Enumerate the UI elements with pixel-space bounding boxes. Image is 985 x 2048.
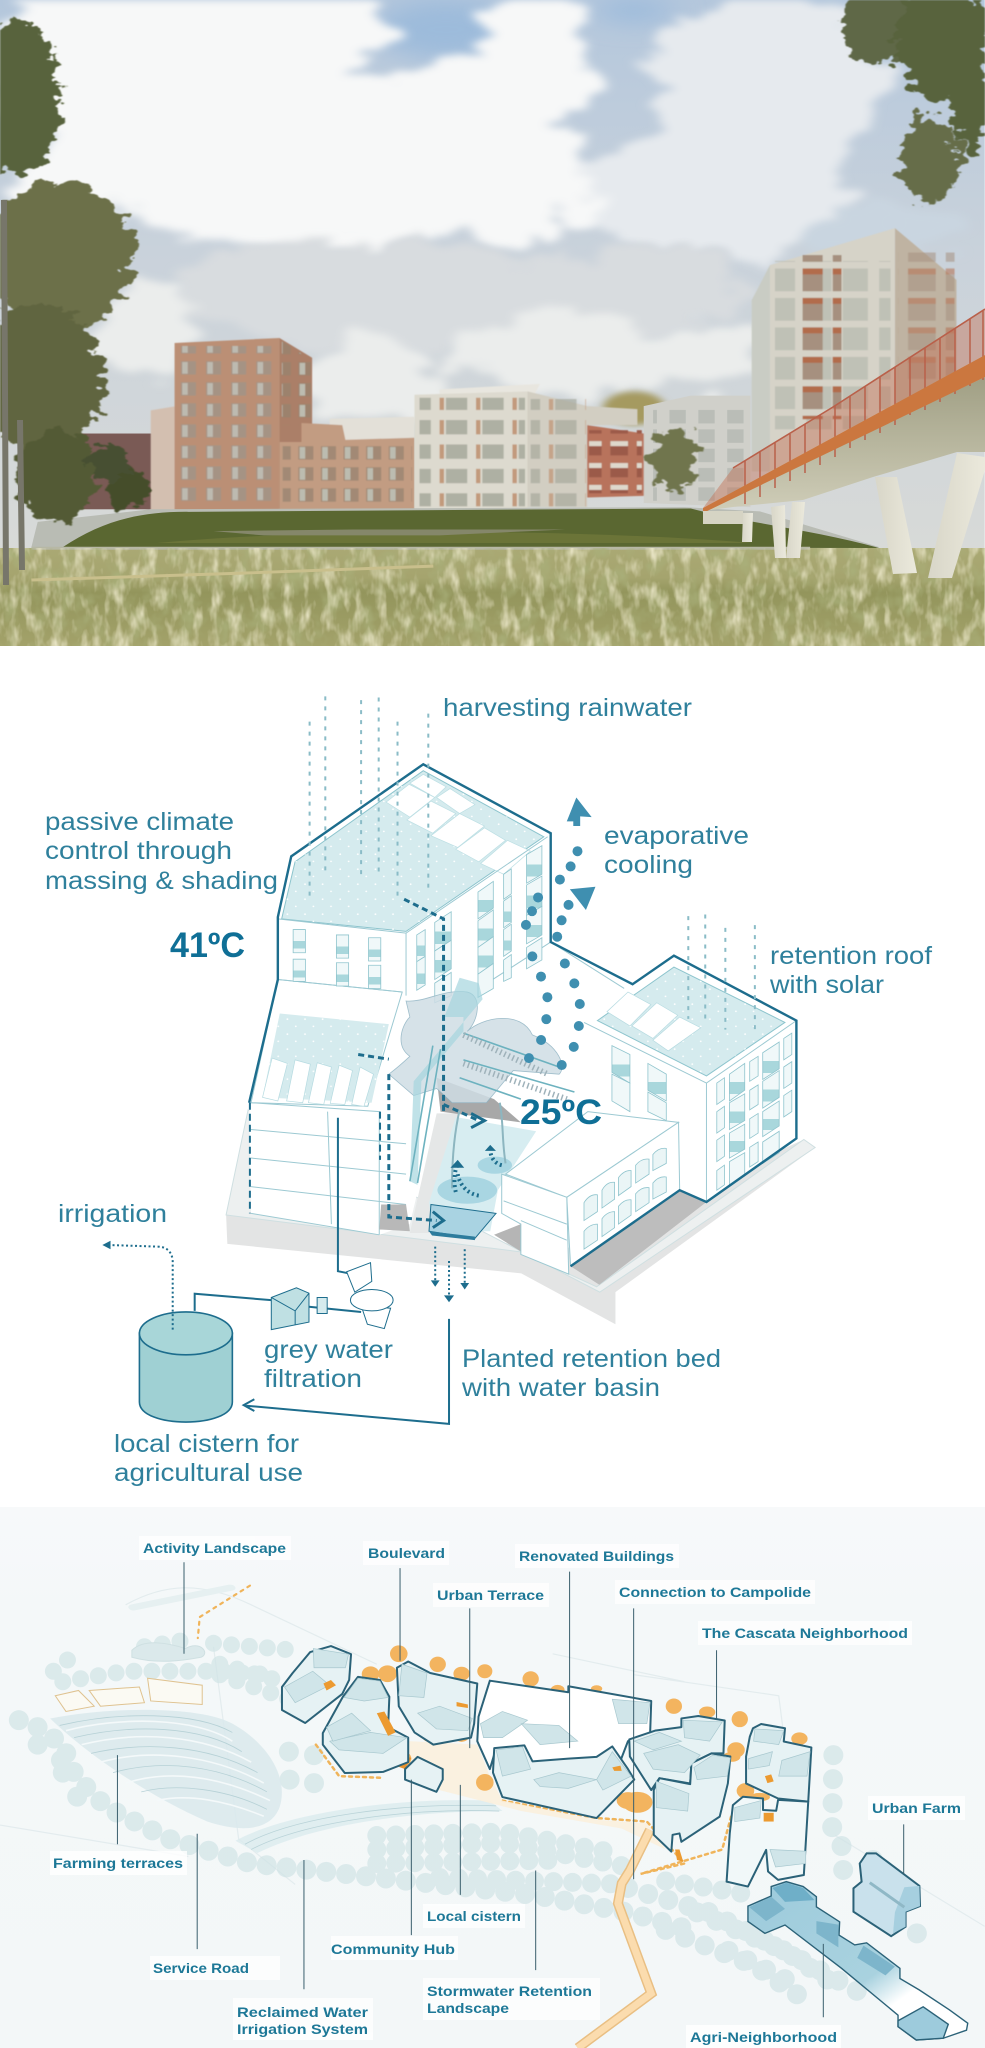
label: evaporative cooling: cooling: [604, 851, 693, 879]
label: grey water filtration: filtration: [264, 1365, 362, 1393]
hill tower: [752, 228, 956, 471]
block 8: [654, 1753, 730, 1852]
arched windows: [584, 1148, 666, 1249]
plaza: [408, 1741, 666, 1850]
plan label backgrounds: [50, 1536, 965, 2048]
label: local cistern: agricultural use: [114, 1459, 303, 1487]
label: passive climate control: [45, 808, 278, 895]
label: local cistern: local cistern for: [114, 1430, 299, 1458]
label: planted retention bed: Planted retention bed: [462, 1345, 721, 1373]
building faces and floors: [251, 837, 624, 1235]
block 3: [397, 1661, 477, 1745]
leader lines: [117, 1562, 904, 2017]
low brick block: [279, 417, 414, 511]
building heavy outline: [249, 764, 796, 1266]
photo: housing blocks rendering: [0, 0, 985, 647]
white gap under photo: [0, 646, 985, 652]
label: evaporative cooling: [604, 822, 749, 879]
orange trees: [362, 1645, 808, 1813]
plan background: [0, 1507, 985, 2048]
right block: [582, 956, 796, 1202]
cistern: [139, 1312, 232, 1422]
label: retention roof: with solar: [769, 971, 884, 999]
label: renovated buildings: Renovated Buildings: [519, 1548, 674, 1564]
block 9: [746, 1724, 811, 1802]
icon: toilet: [347, 1263, 393, 1329]
sky with clouds: [0, 0, 985, 556]
brick tower: [151, 338, 312, 512]
label: retention roof: [769, 942, 932, 999]
label: passive climate control: massing & shading: [45, 867, 278, 895]
plan labels: [53, 1540, 961, 2045]
label: grey water filtration: grey water: [264, 1336, 393, 1364]
label: urban farm: Urban Farm: [872, 1800, 961, 1816]
right block windows: [612, 1033, 792, 1190]
label: local cistern: [114, 1430, 303, 1487]
label: retention roof: retention roof: [770, 942, 932, 970]
label: grey water filtration: [264, 1336, 393, 1393]
diagram labels: [45, 694, 932, 1487]
courtyard trees and balconies: [389, 978, 574, 1185]
label: harvesting rainwater: harvesting rainwater: [443, 694, 692, 722]
farming terraces: [50, 1710, 502, 1853]
label: reclaimed water irrigation: [237, 2004, 369, 2037]
label: stormwater retention landscape: Landscape: [427, 2000, 509, 2016]
label: farming terraces: Farming terraces: [53, 1855, 183, 1871]
elevated bridge: [703, 309, 985, 578]
distant buildings and background trees: [75, 391, 750, 509]
community hub: [405, 1757, 443, 1792]
label: 41 degrees: 41ºC: [170, 926, 245, 965]
label: stormwater retention landscape: [427, 1983, 592, 2016]
green hill and meadow: [0, 507, 985, 647]
activity pavilions: [55, 1678, 202, 1711]
evaporation arrows: [515, 797, 595, 1080]
label: 25 degrees: 25ºC: [520, 1093, 602, 1132]
facade windows: [293, 846, 542, 1003]
agri neighborhood: [748, 1882, 968, 2040]
water basin: [429, 1204, 496, 1240]
label: urban terrace: Urban Terrace: [437, 1587, 544, 1603]
tree trunks: [4, 200, 22, 585]
label: agri neighborhood: Agri-Neighborhood: [690, 2029, 837, 2045]
trees framing the view: [0, 0, 985, 522]
grey water pipes and filter: [195, 1288, 361, 1330]
block 6: [493, 1745, 634, 1818]
activity landscape pond: [132, 1643, 205, 1661]
label: local cistern: Local cistern: [427, 1908, 521, 1924]
label: activity landscape: Activity Landscape: [143, 1540, 286, 1556]
block roof details: [284, 1649, 810, 1867]
evapotranspiration rising arrows: [450, 1145, 502, 1196]
block 1: [282, 1646, 351, 1723]
right roof: [597, 967, 785, 1076]
infiltration arrows: [431, 1247, 469, 1302]
low front block with arches: [502, 1112, 706, 1285]
courtyard: [379, 1078, 536, 1253]
lower roof with solar: [251, 980, 402, 1106]
water flow routes: [250, 899, 484, 1274]
orange courtyard accents: [323, 1680, 774, 1862]
roof retention garden: [282, 771, 544, 931]
label: reclaimed water irrigation: Irrigation System: [237, 2021, 368, 2037]
main building block: [249, 764, 633, 1253]
label: service road: Service Road: [153, 1960, 249, 1976]
label: irrigation: irrigation: [58, 1200, 167, 1228]
orange trees behind hub: [396, 1756, 411, 1769]
dark grey plinth: [571, 1190, 706, 1285]
block 7: [629, 1716, 725, 1790]
label: community hub: Community Hub: [331, 1941, 455, 1957]
label: evaporative cooling: evaporative: [604, 822, 749, 850]
label: Cascata neighborhood: The Cascata Neighborhood: [702, 1625, 908, 1641]
plan drawing: [0, 1562, 985, 2048]
site plan: [0, 1507, 985, 2048]
irrigation route: [102, 1241, 173, 1330]
label: passive climate control: passive climate: [45, 808, 234, 836]
light stone block: [414, 384, 644, 508]
urban farm: [853, 1853, 920, 1936]
label: passive climate control: control through: [45, 837, 232, 865]
orange path lines: [198, 1586, 732, 1874]
block 10: [727, 1797, 808, 1887]
label: boulevard: Boulevard: [368, 1545, 445, 1561]
faint roads: [0, 1588, 985, 1926]
renovated buildings: [477, 1681, 651, 1769]
label: connection to Campolide: Connection to Campolide: [619, 1584, 811, 1600]
label: planted retention bed: with water basin: [461, 1374, 660, 1402]
rainwater dashes: [310, 696, 755, 1030]
tree canopies: [19, 1640, 936, 2003]
label: planted retention bed: [461, 1345, 721, 1402]
housing blocks: [282, 1646, 811, 1887]
base slab: [226, 1110, 815, 1324]
block 2: [323, 1677, 408, 1773]
isometric building diagram: [102, 696, 815, 1424]
road to Campolide: [578, 1830, 651, 2048]
label: reclaimed water irrigation: Reclaimed Water: [237, 2004, 369, 2020]
label: stormwater retention landscape: Stormwater Retention: [427, 1983, 592, 1999]
return pipe to cistern: [244, 1319, 449, 1424]
